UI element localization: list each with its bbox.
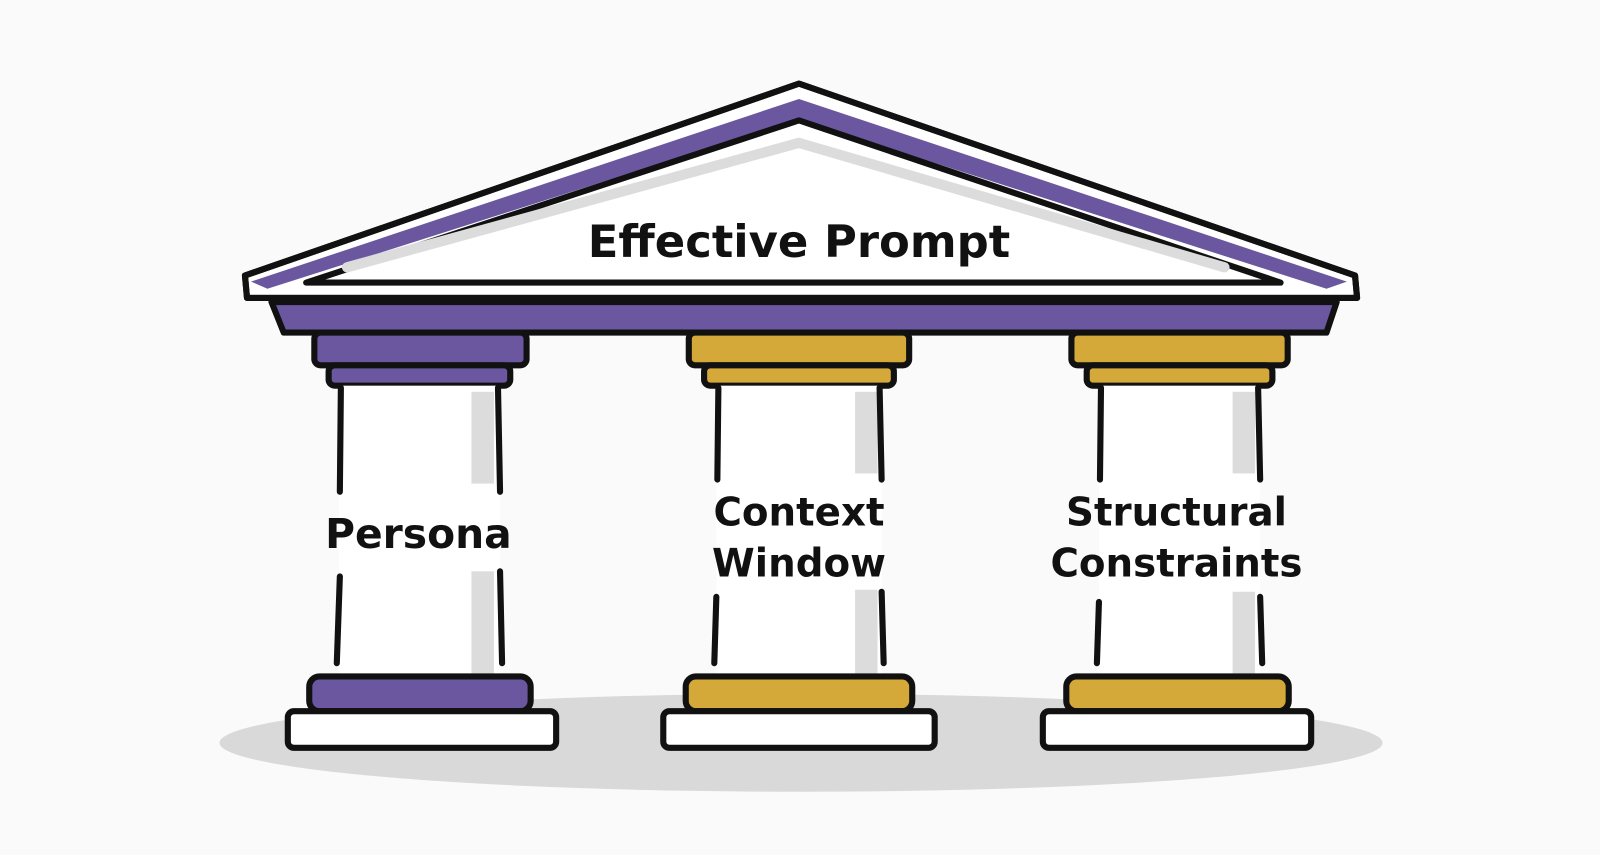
column: Structural Constraints: Constraints <box>1050 541 1303 586</box>
title: Effective Prompt <box>588 215 1010 268</box>
column: Persona: Persona <box>325 510 512 558</box>
roof pediment <box>245 84 1357 333</box>
column: Structural Constraints: Structural <box>1066 490 1287 535</box>
column: Context Window: Window <box>712 541 886 586</box>
column: Structural Constraints <box>1043 333 1311 748</box>
ground shadow <box>219 694 1383 792</box>
column: Context Window <box>663 333 935 748</box>
entablature band <box>271 302 1337 333</box>
column: Context Window: Context <box>713 490 885 535</box>
column: Persona <box>288 333 556 748</box>
